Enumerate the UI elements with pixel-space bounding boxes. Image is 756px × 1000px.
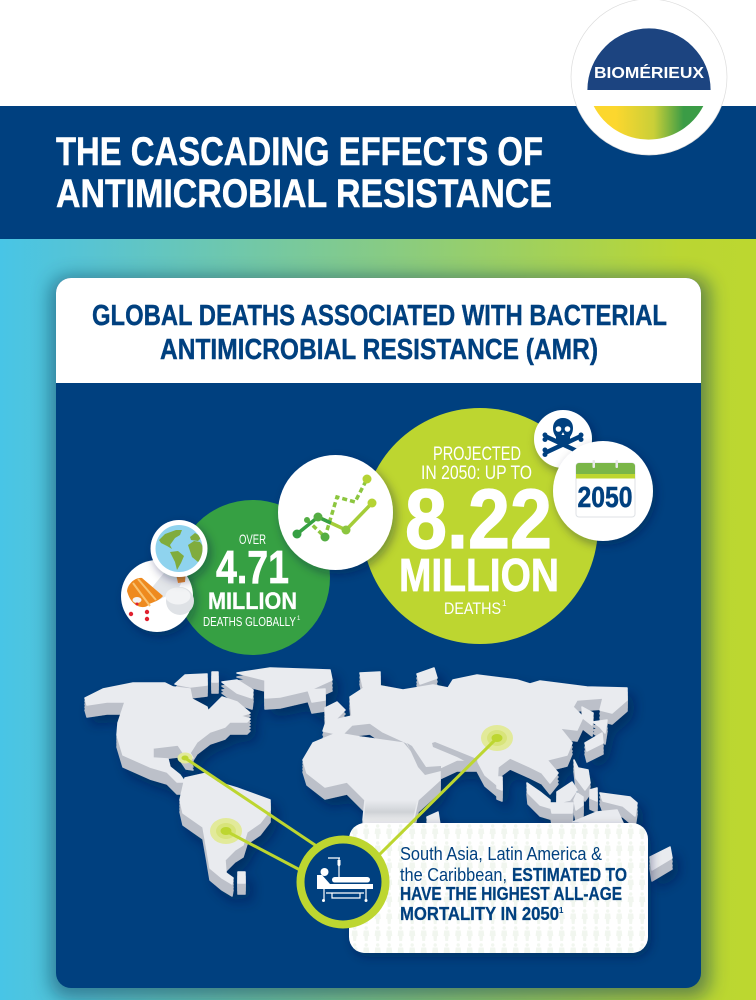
icon: calendar 2050: [553, 441, 653, 541]
hotspot: South Asia: [481, 725, 513, 751]
title: THE CASCADING EFFECTS OF: [56, 130, 543, 174]
green circle text: [203, 531, 301, 629]
lime circle text: IN 2050: UP TO: [421, 463, 532, 484]
panel shadow: [50, 276, 710, 998]
header white strip: [0, 0, 756, 107]
icon: calendar 2050: 2050: [578, 482, 632, 514]
lime circle text: 1: [502, 599, 507, 608]
hotspot: Central America: [178, 752, 192, 764]
lime circle text: MILLION: [399, 549, 559, 601]
icon: trend chart: [278, 455, 393, 570]
map walls: [85, 672, 672, 896]
callout: [349, 823, 648, 953]
header band: [0, 106, 756, 239]
lime circle text: DEATHS: [444, 599, 501, 618]
lime circle text: [399, 444, 559, 618]
panel heading: [92, 300, 667, 366]
green circle text: 4.71: [216, 541, 289, 593]
map land surfaces: [85, 668, 672, 884]
callout text: the Caribbean,: [400, 865, 507, 885]
callout text: [400, 844, 627, 924]
callout text: South Asia, Latin America &: [400, 844, 602, 864]
circle: green 4.71 million: [175, 500, 330, 655]
hotspot: South America: [210, 818, 242, 844]
world map: [85, 668, 672, 896]
green circle text: MILLION: [208, 588, 297, 615]
lime circle text: 8.22: [405, 472, 552, 566]
title: ANTIMICROBIAL RESISTANCE: [56, 172, 552, 216]
icon: hospital bed: [300, 840, 386, 924]
map coast walls: red sea and persian gulf: [407, 742, 478, 775]
connector lines: [185, 738, 497, 871]
panel: global deaths: [56, 278, 701, 988]
logo: bioMérieux: [571, 0, 727, 155]
circle: lime projected 2050: [362, 408, 598, 644]
logo: bioMérieux: BIOMÉRIEUX: [594, 63, 704, 82]
panel heading: ANTIMICROBIAL RESISTANCE (AMR): [160, 334, 598, 366]
green circle text: 1: [297, 616, 301, 622]
icon: pill bottle: [121, 560, 194, 632]
lime circle text: PROJECTED: [433, 444, 521, 465]
callout text: 1: [559, 906, 564, 915]
callout text: MORTALITY IN 2050: [400, 904, 559, 924]
callout text: HAVE THE HIGHEST ALL-AGE: [400, 884, 622, 904]
title: [56, 130, 552, 216]
green circle text: DEATHS GLOBALLY: [203, 614, 296, 629]
icon: globe: [150, 520, 208, 577]
callout text: ESTIMATED TO: [512, 865, 627, 885]
background gradient: [0, 239, 756, 1000]
icon: skull and crossbones: [534, 410, 592, 468]
green circle text: OVER: [239, 531, 266, 547]
